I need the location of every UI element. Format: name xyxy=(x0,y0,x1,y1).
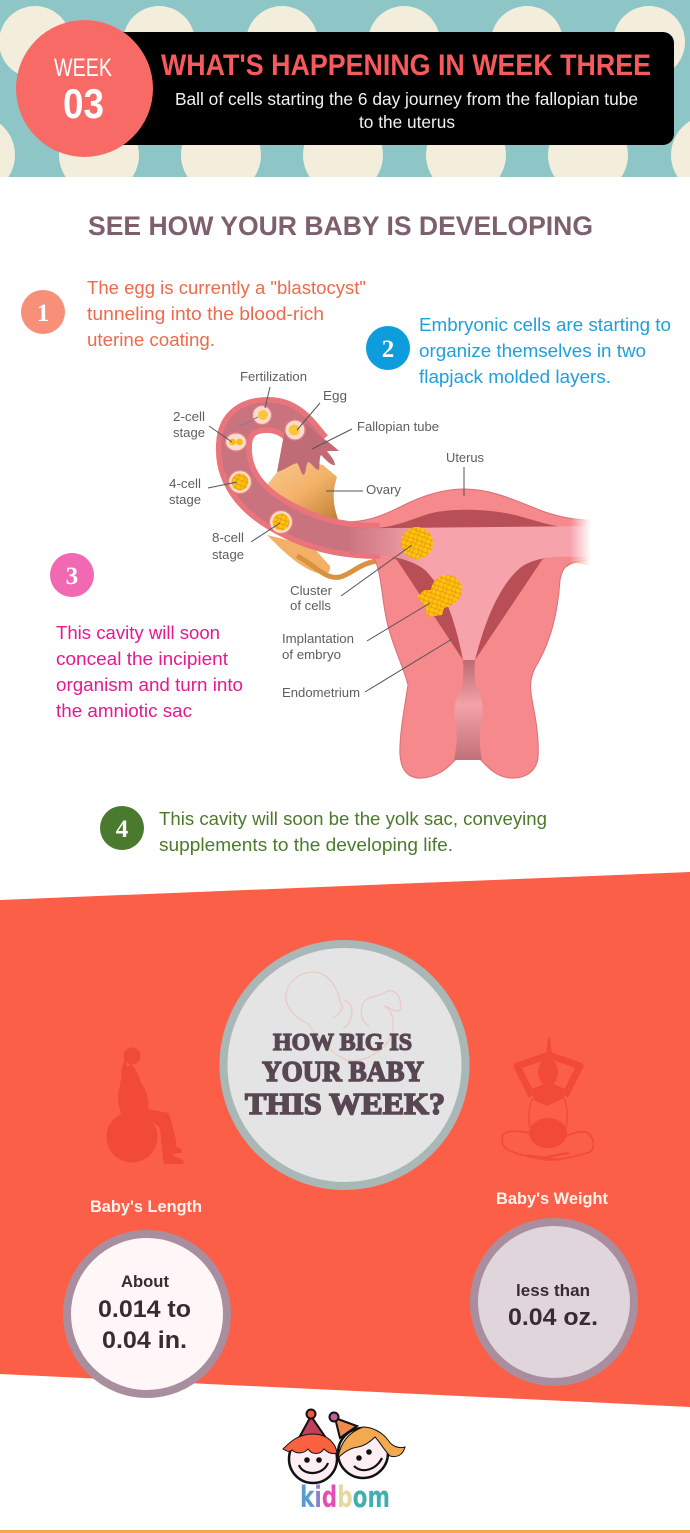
step 3: 3 xyxy=(66,563,78,590)
fimbriae xyxy=(277,424,339,475)
subtitle xyxy=(175,89,638,132)
step 1: The egg is currently a "blastocyst" xyxy=(87,278,366,298)
step 4: 4 xyxy=(116,816,129,843)
step 1: uterine coating. xyxy=(87,330,215,350)
step 2 xyxy=(366,315,671,387)
step 4: supplements to the developing life. xyxy=(159,835,453,855)
panel: how big is your baby xyxy=(0,872,690,1407)
week badge: 03 xyxy=(63,80,104,127)
step 3 xyxy=(50,553,243,721)
uterus wall xyxy=(345,489,590,778)
icon: pregnant woman on exercise ball xyxy=(106,1048,184,1164)
circle heading: HOW BIG IS xyxy=(273,1030,412,1056)
length value circle: 0.014 to xyxy=(98,1296,191,1323)
label: baby's weight: Baby's Weight xyxy=(496,1189,608,1208)
circle heading: THIS WEEK? xyxy=(245,1086,445,1121)
callout lines xyxy=(208,387,464,692)
right edge fade xyxy=(570,505,591,580)
footer line xyxy=(0,1530,690,1533)
ovary xyxy=(267,460,340,524)
ligament and lower ovary tissue xyxy=(267,535,590,577)
diagram labels: stage xyxy=(212,548,244,562)
step 1 xyxy=(21,278,366,350)
logo: Kidbom xyxy=(283,1410,405,1514)
panel: header banner xyxy=(0,0,690,195)
label: baby's length: Baby's Length xyxy=(90,1197,202,1216)
diagram labels: Ovary xyxy=(366,483,402,497)
icon: pregnant woman in yoga pose xyxy=(502,1036,593,1160)
implanted embryo xyxy=(417,575,462,617)
step 1: tunneling into the blood-rich xyxy=(87,304,324,324)
step 2: Embryonic cells are starting to xyxy=(419,315,671,335)
step 3: organism and turn into xyxy=(56,675,243,695)
diagram labels: stage xyxy=(169,493,201,507)
subtitle: Ball of cells starting the 6 day journey from the fallopian tube xyxy=(175,89,638,109)
cervix xyxy=(454,660,483,760)
diagram labels: 4-cell xyxy=(169,477,201,491)
weight value circle xyxy=(474,1222,634,1382)
endometrium dark lining xyxy=(375,510,575,660)
step 1: 1 xyxy=(37,300,49,327)
right child face xyxy=(338,1427,405,1478)
step 2: flapjack molded layers. xyxy=(419,367,611,387)
black title bar xyxy=(100,32,674,145)
circle heading xyxy=(245,1030,445,1121)
diagram labels: of embryo xyxy=(282,648,341,662)
diagram labels: Cluster xyxy=(290,584,332,598)
diagram labels: Egg xyxy=(323,389,347,403)
cells xyxy=(226,406,305,534)
diagram labels: Endometrium xyxy=(282,686,360,700)
sperm xyxy=(238,417,258,426)
week badge xyxy=(16,20,153,157)
step 3: the amniotic sac xyxy=(56,701,192,721)
length value circle: 0.04 in. xyxy=(102,1327,187,1354)
weight value circle: less than xyxy=(516,1281,590,1300)
fallopian tube xyxy=(234,415,380,541)
diagram labels: Uterus xyxy=(446,451,484,465)
weight value circle: 0.04 oz. xyxy=(508,1304,598,1331)
step 3: This cavity will soon xyxy=(56,623,220,643)
step 4 xyxy=(100,806,547,855)
diagram labels: Fertilization xyxy=(240,370,307,384)
length value circle: About xyxy=(121,1272,169,1291)
left child face xyxy=(283,1434,337,1483)
diagram labels: stage xyxy=(173,426,205,440)
left hat xyxy=(300,1410,326,1438)
background polka dots xyxy=(0,6,690,195)
right hat xyxy=(330,1412,357,1438)
diagram labels: of cells xyxy=(290,599,331,613)
step 2: organize themselves in two xyxy=(419,341,646,361)
diagram labels: Fallopian tube xyxy=(357,420,439,434)
uterine cavity xyxy=(350,526,590,660)
week badge: WEEK xyxy=(54,54,112,82)
diagram labels: 2-cell xyxy=(173,410,205,424)
step 3: conceal the incipient xyxy=(56,649,228,669)
heading: SEE HOW YOUR BABY IS DEVELOPING xyxy=(88,211,593,241)
baby outline xyxy=(286,972,401,1061)
logo wordmark: kidbom xyxy=(300,1480,390,1514)
diagram labels xyxy=(169,370,484,700)
step 4: This cavity will soon be the yolk sac, conveying xyxy=(159,809,547,829)
diagram: female reproductive system xyxy=(169,370,591,778)
diagram labels: Implantation xyxy=(282,632,354,646)
center circle xyxy=(224,944,466,1186)
diagram labels: 8-cell xyxy=(212,531,244,545)
cluster of cells xyxy=(401,527,433,559)
subtitle: to the uterus xyxy=(359,112,455,132)
length value circle xyxy=(67,1234,227,1394)
step 2: 2 xyxy=(382,336,394,363)
circle heading: YOUR BABY xyxy=(262,1056,424,1088)
